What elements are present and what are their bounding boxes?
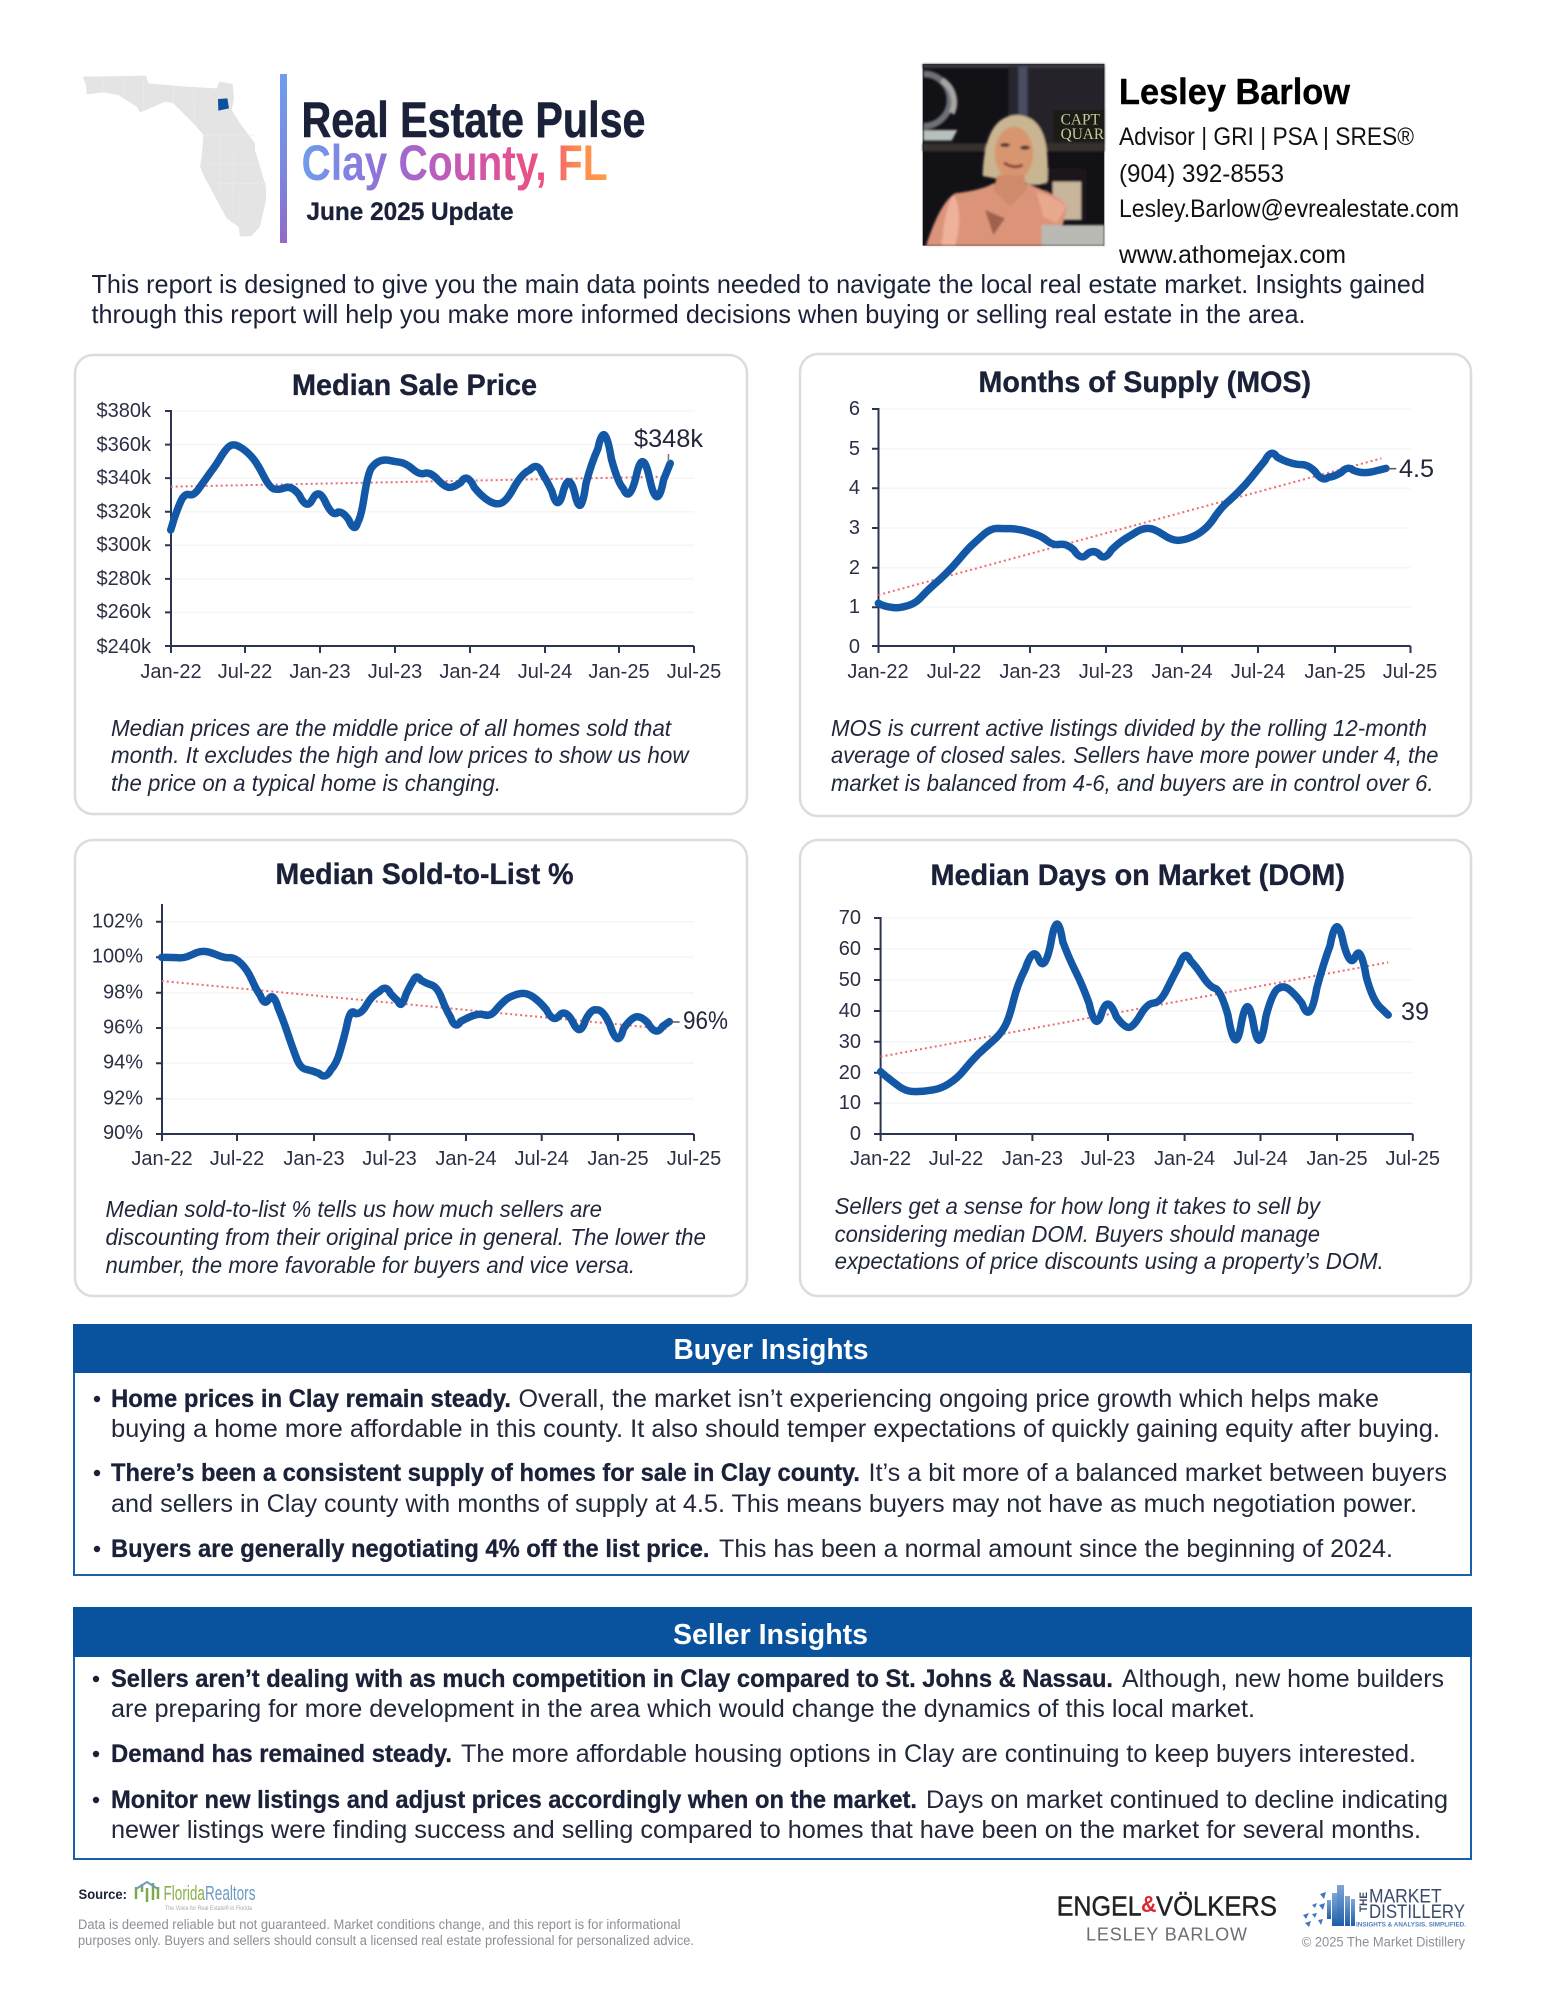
description: months of supply — [831, 715, 1438, 796]
line chart: median days on market: 40 — [839, 1000, 861, 1022]
line chart: median sold-to-list: Jul-22 — [210, 1148, 264, 1170]
description: median sale price: the price on a typical home is changing. — [111, 770, 501, 796]
insight 1: Home prices in Clay remain steady. — [111, 1385, 511, 1413]
line chart: months of supply: Jan-24 — [1151, 661, 1213, 683]
gradient divider bar — [280, 74, 287, 243]
line chart: months of supply: Jul-23 — [1079, 661, 1133, 683]
insight 2: There’s been a consistent supply of homes for sale in Clay county. — [111, 1459, 860, 1487]
insight 2: The more affordable housing options in Clay are continuing to keep buyers interested. — [461, 1740, 1416, 1768]
agent contact details — [1118, 71, 1459, 269]
line chart: median sold-to-list: 94% — [103, 1052, 143, 1074]
line chart: median days on market: Jul-22 — [929, 1148, 983, 1170]
insight 2: It’s a bit more of a balanced market between buyers — [868, 1459, 1447, 1487]
description: median sale price: Median prices are the middle price of all homes sold that — [111, 715, 673, 741]
insight 2 — [94, 1459, 1447, 1518]
source line with Florida Realtors logo: Source: — [78, 1886, 127, 1902]
line chart: months of supply: 2 — [849, 557, 860, 579]
line chart: months of supply: 3 — [849, 517, 860, 539]
line chart: median sale price: Jul-22 — [218, 661, 272, 683]
heading: median sold-to-list: Median Sold-to-List % — [276, 858, 574, 891]
line chart: median days on market: 20 — [839, 1062, 861, 1084]
line chart: median sale price: $380k — [96, 400, 152, 422]
panel: buyer insights — [73, 1324, 1472, 1575]
line chart: median sold-to-list: 92% — [103, 1088, 143, 1110]
line chart: median sale price — [96, 400, 721, 683]
title: Clay County, FL — [302, 135, 608, 191]
insight 3: Monitor new listings and adjust prices accordingly when on the market. — [111, 1786, 917, 1814]
line chart: median sold-to-list: Jul-24 — [514, 1148, 569, 1170]
line chart: months of supply: 0 — [849, 636, 860, 658]
line chart: median sale price: $260k — [96, 601, 152, 623]
line chart: median sold-to-list: 100% — [92, 946, 143, 968]
line chart: median days on market: 10 — [839, 1092, 861, 1114]
line chart: months of supply: Jan-22 — [847, 661, 909, 683]
line chart: median days on market: Jul-25 — [1386, 1148, 1440, 1170]
insight 1: buying a home more affordable in this county. It also should temper expectations of quickly gaining equity after buying. — [111, 1415, 1440, 1443]
description: median sold-to-list: number, the more favorable for buyers and vice versa. — [106, 1252, 635, 1278]
insight 1: Overall, the market isn’t experiencing ongoing price growth which helps make — [518, 1385, 1379, 1413]
description: median days on market: expectations of price discounts using a property’s DOM. — [835, 1248, 1384, 1274]
line chart: median days on market: 30 — [839, 1031, 861, 1053]
panel: median sold-to-list — [75, 840, 747, 1296]
agent contact details: (904) 392-8553 — [1119, 160, 1284, 188]
line chart: median days on market: Jan-25 — [1306, 1148, 1368, 1170]
line chart: median days on market — [839, 907, 1440, 1170]
line chart: median sold-to-list: Jan-25 — [587, 1148, 649, 1170]
source line with Florida Realtors logo: The Voice for Real Estate® in Florida — [165, 1904, 252, 1912]
line chart: months of supply: 4 — [849, 477, 860, 499]
line chart: median days on market: 60 — [839, 938, 861, 960]
logo: The Market Distillery: © 2025 The Market Distillery — [1302, 1934, 1465, 1950]
intro text — [92, 269, 1425, 329]
line chart: median sold-to-list: Jan-23 — [283, 1148, 345, 1170]
logo: The Market Distillery — [1302, 1885, 1466, 1950]
intro text: through this report will help you make more informed decisions when buying or selling real estate in the area. — [92, 299, 1306, 329]
insight 3 — [93, 1786, 1448, 1844]
line chart: median sale price: $320k — [96, 501, 152, 523]
description: median days on market: considering median DOM. Buyers should manage — [835, 1221, 1320, 1247]
heading: median sale price: Median Sale Price — [292, 369, 537, 402]
line chart: median sold-to-list: Jan-22 — [131, 1148, 193, 1170]
line chart: median days on market: Jan-24 — [1154, 1148, 1215, 1170]
logo: The Market Distillery: DISTILLERY — [1369, 1902, 1465, 1923]
line chart: median sale price: Jul-23 — [368, 661, 422, 683]
photo: agent portrait: CAPT — [1061, 111, 1100, 128]
panel: months of supply — [800, 354, 1471, 816]
line chart: months of supply: Jul-24 — [1231, 661, 1285, 683]
line chart: median days on market: Jul-24 — [1233, 1148, 1288, 1170]
heading: seller insights: Seller Insights — [673, 1619, 868, 1651]
logo: The Market Distillery: THE — [1358, 1892, 1370, 1912]
panel: seller insights — [73, 1607, 1472, 1859]
line chart: median sale price: $300k — [96, 534, 152, 556]
line chart: median sold-to-list: 102% — [92, 910, 143, 932]
line chart: months of supply: 6 — [849, 398, 860, 420]
line chart: median sale price: $240k — [96, 636, 152, 658]
insight 1: are preparing for more development in the area which would change the dynamics of this local market. — [111, 1695, 1255, 1723]
description: median days on market: Sellers get a sense for how long it takes to sell by — [835, 1193, 1321, 1219]
line chart: median sale price: $280k — [96, 568, 152, 590]
insight 1 — [93, 1665, 1444, 1723]
description: median sold-to-list: Median sold-to-list % tells us how much sellers are — [106, 1196, 602, 1222]
title: Real Estate Pulse — [302, 92, 646, 148]
line chart: months of supply: Jul-25 — [1383, 661, 1437, 683]
panel: median sale price — [75, 355, 747, 814]
value label: 39: 39 — [1401, 998, 1429, 1026]
line chart: median sale price: Jan-25 — [588, 661, 650, 683]
agent contact details: www.athomejax.com — [1118, 241, 1346, 269]
insight 2: Demand has remained steady. — [111, 1740, 452, 1768]
line chart: median days on market: Jan-23 — [1002, 1148, 1063, 1170]
line chart: median sold-to-list: Jan-24 — [435, 1148, 497, 1170]
line chart: median sale price: Jul-24 — [518, 661, 572, 683]
logo: Engel and Volkers: & — [1141, 1891, 1156, 1917]
logo: The Market Distillery: MARKET — [1369, 1887, 1442, 1908]
line chart: median days on market: Jan-22 — [850, 1148, 911, 1170]
line chart: median sold-to-list: Jul-25 — [667, 1148, 721, 1170]
insight 3: Days on market continued to decline indicating — [926, 1786, 1448, 1814]
line chart: months of supply: Jan-25 — [1304, 661, 1366, 683]
line chart: median sale price: Jan-24 — [439, 661, 501, 683]
title — [302, 92, 646, 226]
insight 1: Sellers aren’t dealing with as much competition in Clay compared to St. Johns & Nassau. — [111, 1665, 1113, 1693]
line chart: median sale price: Jan-22 — [140, 661, 202, 683]
panel: median days on market — [800, 840, 1471, 1296]
logo: Engel and Volkers: LESLEY BARLOW — [1086, 1925, 1247, 1945]
line chart: median sale price: $340k — [96, 467, 152, 489]
value label: 96%: 96% — [683, 1007, 728, 1035]
line chart: months of supply: Jul-22 — [927, 661, 981, 683]
logo: The Market Distillery: INSIGHTS & ANALYSIS. SIMPLIFIED. — [1356, 1922, 1466, 1929]
title: June 2025 Update — [306, 198, 514, 226]
description: median sale price: month. It excludes the high and low prices to show us how — [111, 742, 690, 768]
logo: Engel and Volkers: VÖLKERS — [1156, 1891, 1277, 1922]
value label: 4.5: 4.5 — [1399, 455, 1434, 483]
line chart: months of supply: Jan-23 — [999, 661, 1061, 683]
line chart: median sale price: Jul-25 — [667, 661, 721, 683]
line chart: median days on market: 50 — [839, 969, 861, 991]
line chart: months of supply: 1 — [849, 596, 860, 618]
heading: months of supply: Months of Supply (MOS) — [978, 366, 1311, 399]
line chart: median sold-to-list — [92, 904, 728, 1170]
insight 3: This has been a normal amount since the beginning of 2024. — [719, 1535, 1393, 1563]
agent contact details: Lesley.Barlow@evrealestate.com — [1119, 195, 1459, 223]
line chart: median sold-to-list: 98% — [103, 982, 143, 1004]
insight 2: and sellers in Clay county with months of supply at 4.5. This means buyers may not have as much negotiation power. — [111, 1490, 1417, 1518]
insight 3: newer listings were finding success and selling compared to homes that have been on the market for several months. — [111, 1816, 1421, 1844]
description: months of supply: MOS is current active listings divided by the rolling 12-month — [831, 715, 1427, 741]
description: months of supply: average of closed sales. Sellers have more power under 4, the — [831, 742, 1438, 768]
value label: 348k: $348k — [634, 425, 703, 453]
disclaimer — [78, 1917, 694, 1948]
insight 3: Buyers are generally negotiating 4% off the list price. — [111, 1535, 710, 1563]
icon: Florida map with Clay County highlighted — [83, 76, 266, 237]
intro text: This report is designed to give you the main data points needed to navigate the local real estate market. Insights gained — [92, 269, 1425, 299]
insight 3 — [94, 1535, 1393, 1563]
logo: Engel and Volkers: ENGEL — [1057, 1891, 1142, 1922]
line chart: months of supply — [847, 398, 1437, 683]
heading: buyer insights: Buyer Insights — [674, 1334, 868, 1366]
description: median sale price — [111, 715, 690, 796]
description: median sold-to-list: discounting from their original price in general. The lower the — [106, 1224, 706, 1250]
line chart: median sold-to-list: 90% — [103, 1122, 143, 1144]
description: median days on market — [835, 1193, 1384, 1274]
insight 1 — [94, 1385, 1440, 1443]
agent contact details: Advisor | GRI | PSA | SRES® — [1119, 123, 1415, 151]
line chart: median days on market: 0 — [850, 1123, 861, 1145]
line chart: median sold-to-list: Jul-23 — [362, 1148, 417, 1170]
photo: agent portrait: QUAR — [1061, 126, 1105, 143]
line chart: median sold-to-list: 96% — [103, 1016, 143, 1038]
line chart: median sale price: Jan-23 — [289, 661, 351, 683]
disclaimer: purposes only. Buyers and sellers should consult a licensed real estate professional for personalized advice. — [78, 1933, 694, 1948]
agent contact details: Lesley Barlow — [1119, 71, 1351, 112]
line chart: median days on market: 70 — [839, 907, 861, 929]
description: months of supply: market is balanced from 4-6, and buyers are in control over 6. — [831, 770, 1434, 796]
line chart: median sale price: $360k — [96, 434, 152, 456]
photo: agent portrait — [923, 64, 1105, 246]
line chart: months of supply: 5 — [849, 438, 860, 460]
insight 1: Although, new home builders — [1122, 1665, 1444, 1693]
heading: median days on market: Median Days on Market (DOM) — [930, 859, 1345, 892]
logo: Engel and Volkers — [1057, 1891, 1277, 1945]
disclaimer: Data is deemed reliable but not guaranteed. Market conditions change, and this report is for informational — [78, 1917, 680, 1932]
source line with Florida Realtors logo: FloridaRealtors — [164, 1883, 256, 1905]
line chart: median days on market: Jul-23 — [1081, 1148, 1135, 1170]
source line with Florida Realtors logo — [78, 1882, 256, 1912]
description: median sold-to-list — [106, 1196, 706, 1278]
